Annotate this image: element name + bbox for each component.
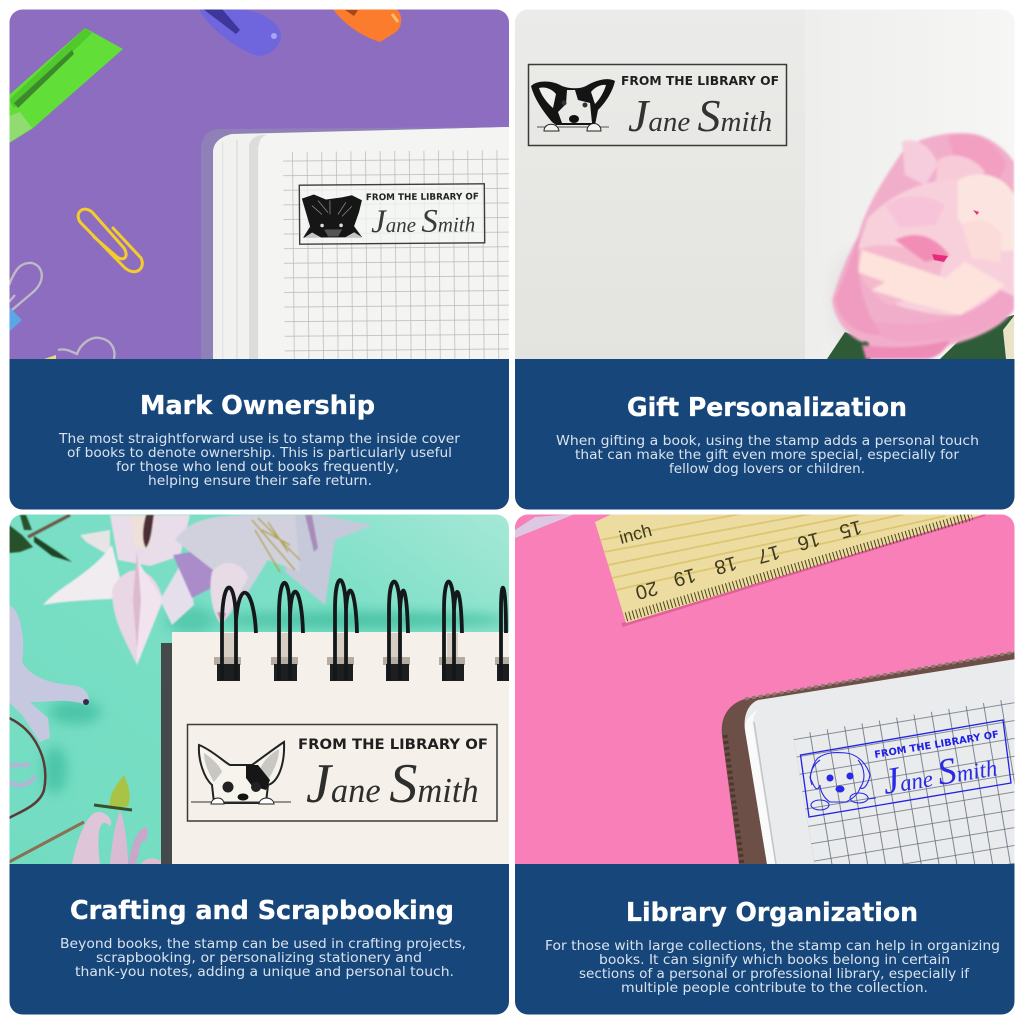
stamp: corgi [528,64,786,146]
icon: pink peony [827,133,1014,359]
panel: crafting and scrapbooking [9,514,510,1015]
ruler label: inch [617,520,654,548]
stamp name: Jane Smith [306,753,479,815]
notebook pages [213,127,509,359]
icon: purple clip [199,9,281,56]
body text [556,434,979,477]
icon: top flowers [9,515,372,665]
stamp: yorkie [299,184,485,244]
photo: spiral notebook with flowers [9,514,510,865]
caption: mark ownership [9,359,510,510]
icon: yellow paperclip [78,209,142,272]
photo: purple desk with notebook [9,9,515,367]
caption: crafting and scrapbooking [9,864,510,1015]
photo: open card with peony [515,9,1015,360]
icon: yorkie dog [302,194,362,238]
icon: wooden ruler: 18 [712,551,739,578]
spiral binding [214,580,510,681]
panel: gift personalization [515,9,1016,510]
icon: puppy dog [810,753,876,810]
body text: for those who lend out books frequently, [116,460,399,475]
stamp heading: FROM THE LIBRARY OF [366,192,479,203]
panel: library organization [515,514,1024,1015]
heading: Library Organization [626,898,918,928]
body text: sections of a personal or professional library, especially if [579,967,969,982]
stamp name: Jane Smith [880,743,1000,803]
stamp name: Jane Smith [371,203,475,240]
icon: wooden ruler: 15 [837,515,864,542]
stamp heading: FROM THE LIBRARY OF [621,74,779,88]
icon: wooden ruler: 17 [755,540,782,567]
panel: mark ownership [9,9,515,510]
icon: green highlighter [9,28,123,143]
body text: For those with large collections, the stamp can help in organizing [545,939,1000,954]
icon: wooden ruler: 20 [633,576,660,603]
icon: corgi dog [531,79,615,131]
icon: orange clip [333,9,401,42]
stamp heading: FROM THE LIBRARY OF [874,729,1000,761]
icon: binder clips [9,263,114,359]
body text: books. It can signify which books belong in certain [599,953,950,968]
stamp heading: FROM THE LIBRARY OF [298,737,488,753]
icon: wooden ruler: 19 [671,563,698,590]
caption: gift personalization [515,359,1016,510]
icon: left flowers [9,605,89,818]
stamp: chihuahua [188,724,497,821]
body text: multiple people contribute to the collection. [621,981,928,996]
notebook page [172,632,510,865]
body text: thank-you notes, adding a unique and personal touch. [75,965,454,980]
photo: pink desk with ruler and notebook [515,514,1024,922]
notebook cover [722,652,1016,864]
icon: chihuahua dog [191,742,291,804]
body text [545,939,1000,996]
body text: of books to denote ownership. This is particularly useful [67,446,452,461]
body text: When gifting a book, using the stamp adds a personal touch [556,434,979,449]
heading: Crafting and Scrapbooking [70,896,454,926]
caption: library organization [515,864,1016,1015]
heading: Mark Ownership [140,391,375,421]
notebook cover [201,127,509,359]
body text: helping ensure their safe return. [148,474,372,489]
notebook grid [283,150,515,367]
notebook grid [793,695,1024,922]
notebook cover [161,643,173,865]
body text: that can make the gift even more special, especially for [575,448,960,463]
heading: Gift Personalization [627,393,907,423]
body text: fellow dog lovers or children. [669,462,865,477]
body text [58,432,461,489]
icon: wooden ruler [595,514,985,625]
icon: bottom flower buds [9,775,165,864]
body text: Beyond books, the stamp can be used in crafting projects, [60,937,466,952]
stamp: puppy [800,720,1011,817]
body text: The most straightforward use is to stamp the inside cover [58,432,461,447]
stamp name: Jane Smith [628,90,772,141]
body text [60,937,466,980]
notebook page [745,659,1016,864]
body text: scrapbooking, or personalizing stationery and [96,951,422,966]
icon: wooden ruler: 16 [795,527,822,554]
